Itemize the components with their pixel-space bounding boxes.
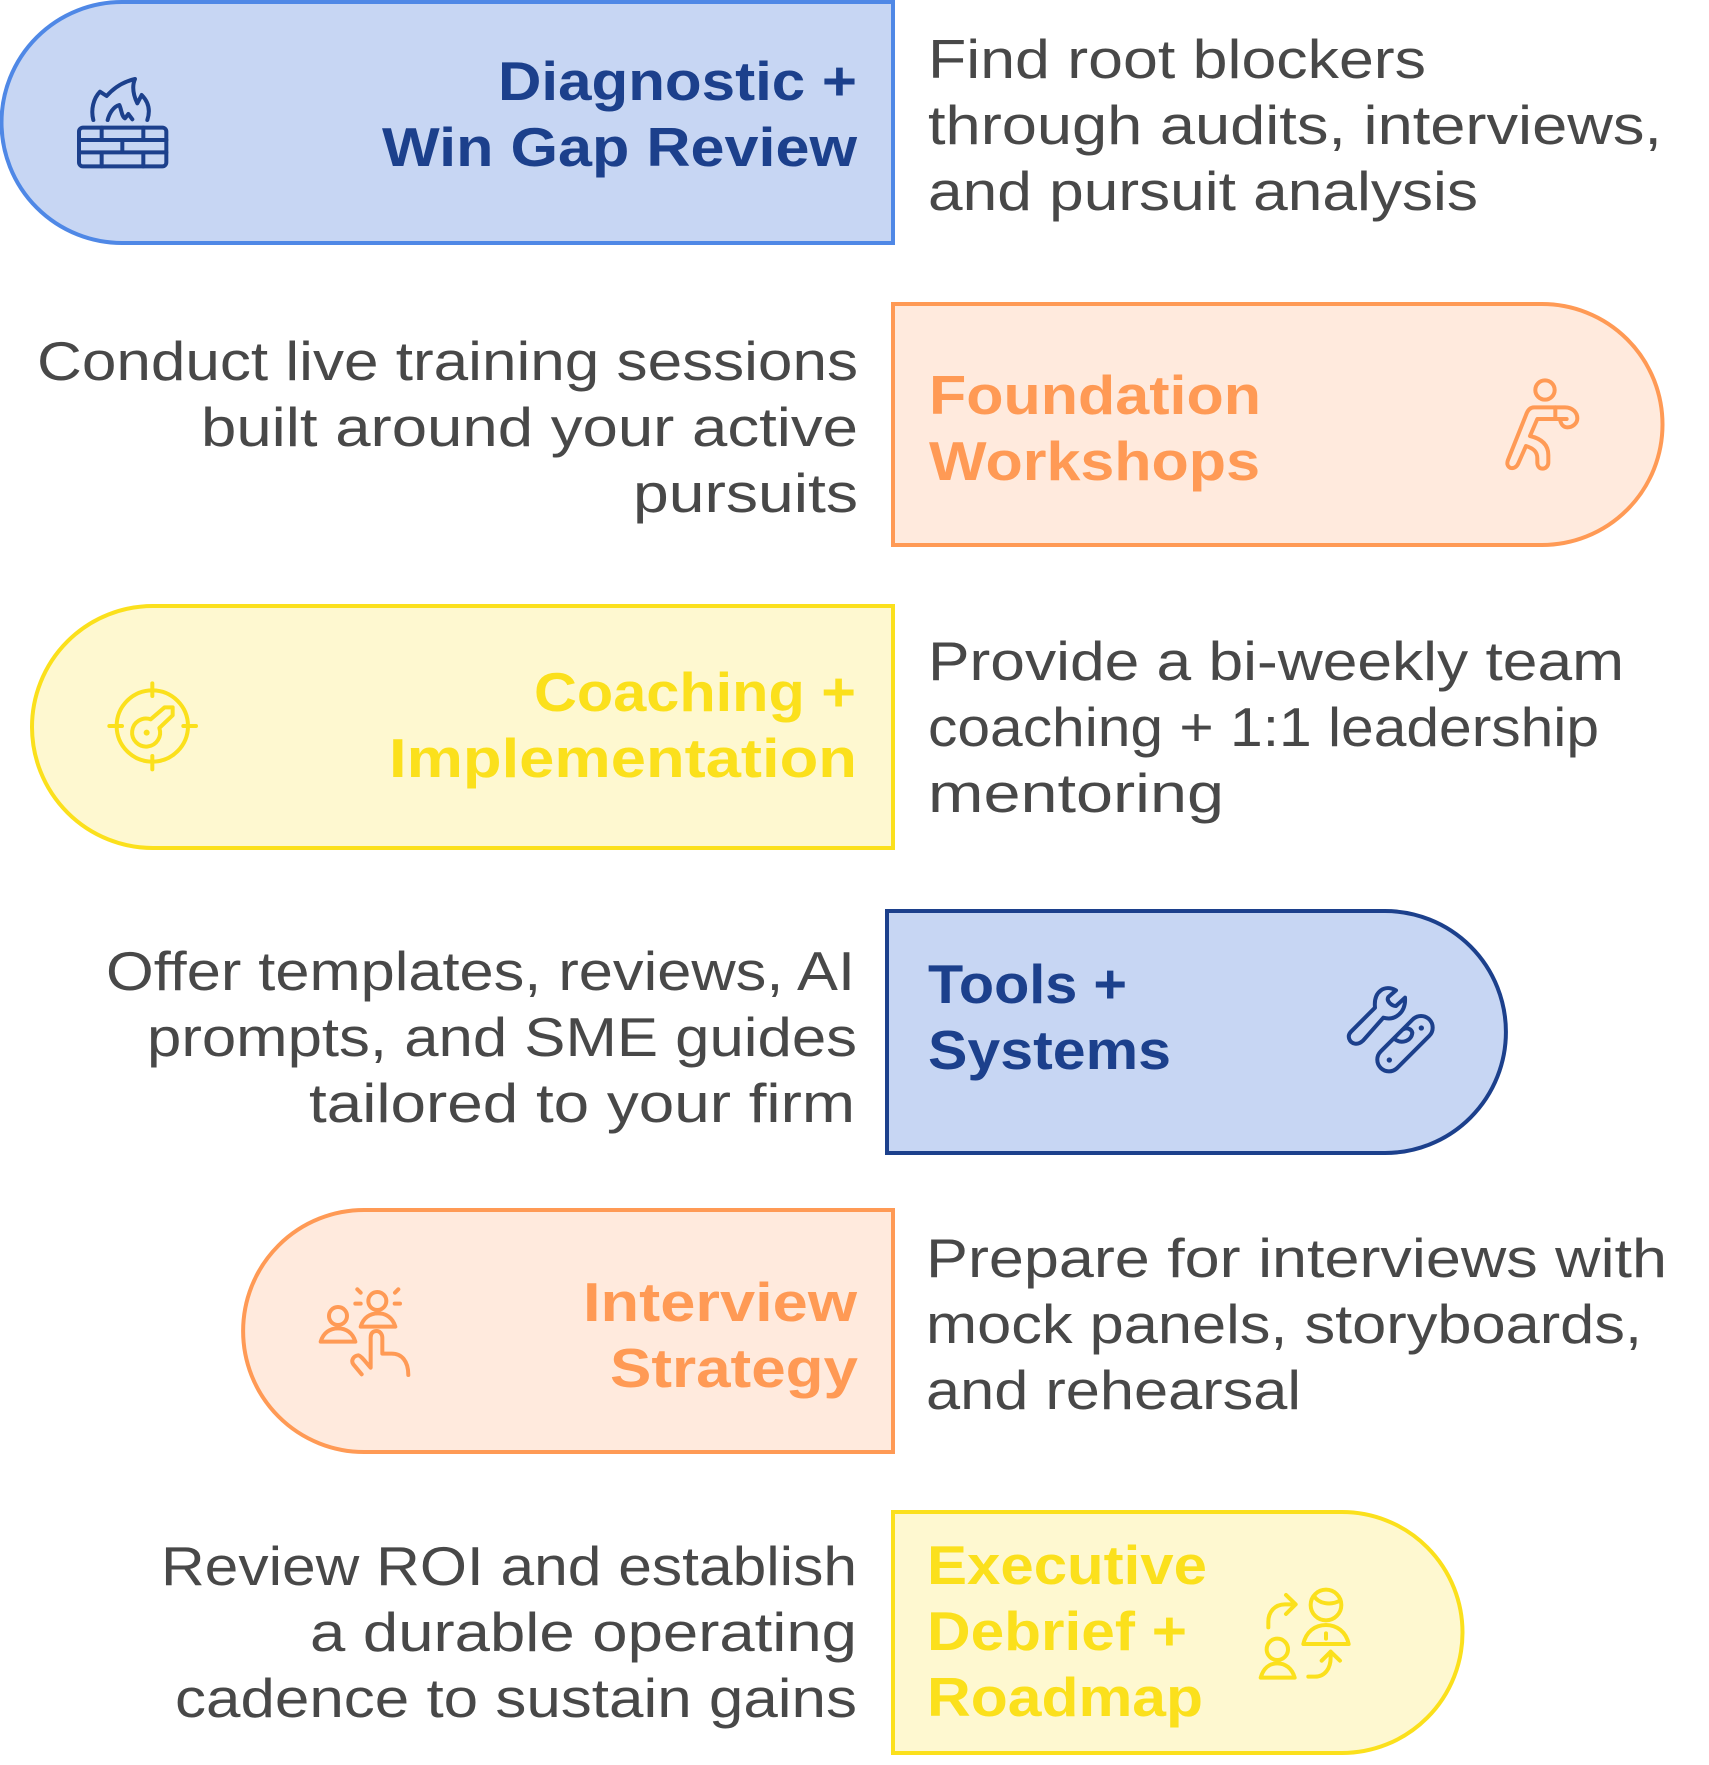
description: Diagnostic — [928, 28, 1662, 222]
icon: people and pointing hand — [321, 1289, 408, 1375]
description: Interview — [926, 1227, 1667, 1421]
description: Interview: mock panels, storyboards, — [926, 1293, 1642, 1355]
heading — [929, 364, 1261, 492]
pill shape — [2, 2, 893, 243]
panel: Diagnostic + Win Gap Review — [2, 2, 893, 243]
panel: Coaching + Implementation — [32, 606, 893, 848]
heading — [928, 953, 1171, 1081]
description: Tools: Offer templates, reviews, AI — [106, 940, 855, 1002]
pill shape — [893, 304, 1663, 545]
description: Executive: a durable operating — [310, 1601, 857, 1663]
description: Coaching: mentoring — [928, 762, 1224, 824]
heading: Systems — [928, 1019, 1171, 1081]
heading — [389, 661, 857, 789]
pill shape — [893, 1512, 1463, 1753]
description: Interview: Prepare for interviews with — [926, 1227, 1667, 1289]
heading: Foundation — [929, 364, 1261, 426]
heading — [382, 50, 857, 178]
panel: Tools + Systems — [887, 911, 1506, 1153]
icon: mentor exchange — [1261, 1590, 1349, 1678]
icon: boxer — [1507, 380, 1577, 469]
heading: Roadmap — [927, 1666, 1203, 1728]
description: Tools — [106, 940, 857, 1134]
panel: Foundation Workshops — [893, 304, 1663, 545]
description: Executive: cadence to sustain gains — [175, 1667, 857, 1729]
description: Coaching: Provide a bi-weekly team — [928, 630, 1624, 692]
description: Executive: Review ROI and establish — [161, 1535, 857, 1597]
description: Foundation: Conduct live training sessions — [37, 330, 858, 392]
pill shape — [887, 911, 1506, 1153]
description: Foundation: built around your active — [201, 396, 858, 458]
description: Interview: and rehearsal — [926, 1359, 1301, 1421]
heading: Implementation — [389, 727, 857, 789]
heading: Interview — [583, 1271, 857, 1333]
heading: Tools + — [928, 953, 1127, 1015]
heading: Win Gap Review — [382, 116, 857, 178]
pill shape — [243, 1210, 893, 1452]
description: Diagnostic: through audits, interviews, — [928, 94, 1662, 156]
icon: firewall with flames — [79, 79, 166, 166]
description: Tools: prompts, and SME guides — [147, 1006, 857, 1068]
heading: Workshops — [929, 430, 1260, 492]
heading: Strategy — [610, 1337, 858, 1399]
panel: Executive Debrief + Roadmap — [893, 1512, 1463, 1753]
description: Foundation — [37, 330, 858, 524]
heading — [583, 1271, 858, 1399]
panel: Interview Strategy — [243, 1210, 893, 1452]
heading: Executive — [927, 1534, 1207, 1596]
description: Executive — [161, 1535, 857, 1729]
heading: Coaching + — [534, 661, 856, 723]
description: Coaching: coaching + 1:1 leadership — [928, 696, 1599, 758]
heading: Debrief + — [927, 1600, 1187, 1662]
description: Diagnostic: and pursuit analysis — [928, 160, 1478, 222]
description: Diagnostic: Find root blockers — [928, 28, 1426, 90]
icon: key in target — [109, 683, 196, 769]
heading: Diagnostic + — [498, 50, 857, 112]
pill shape — [32, 606, 893, 848]
icon: wrench and pocket knife — [1349, 988, 1438, 1076]
description: Coaching — [928, 630, 1624, 824]
description: Foundation: pursuits — [633, 462, 858, 524]
heading — [927, 1534, 1207, 1728]
description: Tools: tailored to your firm — [309, 1072, 855, 1134]
